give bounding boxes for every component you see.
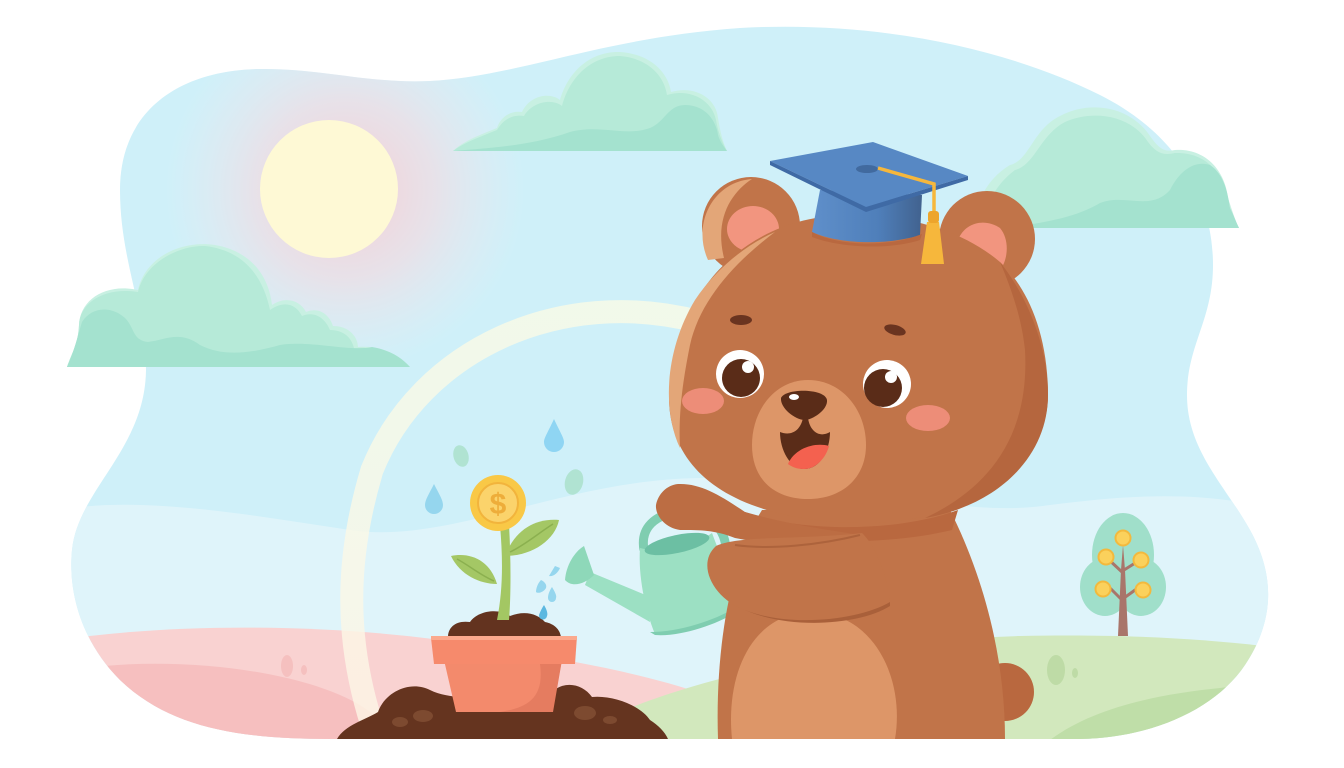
tail: [976, 663, 1034, 721]
plant with coin: [451, 475, 559, 620]
collar shadow: [745, 510, 958, 541]
muzzle: [752, 380, 866, 499]
icon: sun: [260, 120, 398, 258]
plant with coin: $: [490, 488, 507, 521]
pink hill: [88, 628, 686, 739]
cheeks: [682, 388, 724, 414]
nose: [781, 391, 827, 420]
small shrubs: [281, 655, 1078, 685]
dark pink hill: [107, 664, 359, 739]
far hills: [72, 478, 1268, 688]
tassel: [878, 168, 934, 215]
graduation cap: [770, 142, 968, 264]
water drops in the air: [425, 419, 586, 514]
head: [669, 215, 1048, 523]
arm front: [707, 533, 890, 621]
soil mound: [337, 685, 668, 739]
water stream drops: [536, 566, 560, 620]
cloud: top middle: [453, 52, 727, 151]
mouth: [780, 418, 830, 469]
ears: [702, 177, 800, 275]
watering can: [565, 512, 735, 635]
eyes: [716, 350, 911, 408]
cloud: left: [67, 244, 410, 367]
icon: coin: [470, 475, 526, 531]
arc: rainbow: [352, 312, 700, 725]
bear: [656, 177, 1048, 739]
cloud: top right: [975, 107, 1239, 228]
brows: [730, 315, 752, 325]
arm back with paw: [656, 484, 860, 546]
green hill: [634, 636, 1256, 739]
body: [718, 510, 1005, 739]
dark green hill: [1052, 687, 1226, 739]
plant pot: [431, 611, 577, 712]
sun glow: [198, 69, 492, 336]
tree with coins: [1080, 513, 1166, 636]
